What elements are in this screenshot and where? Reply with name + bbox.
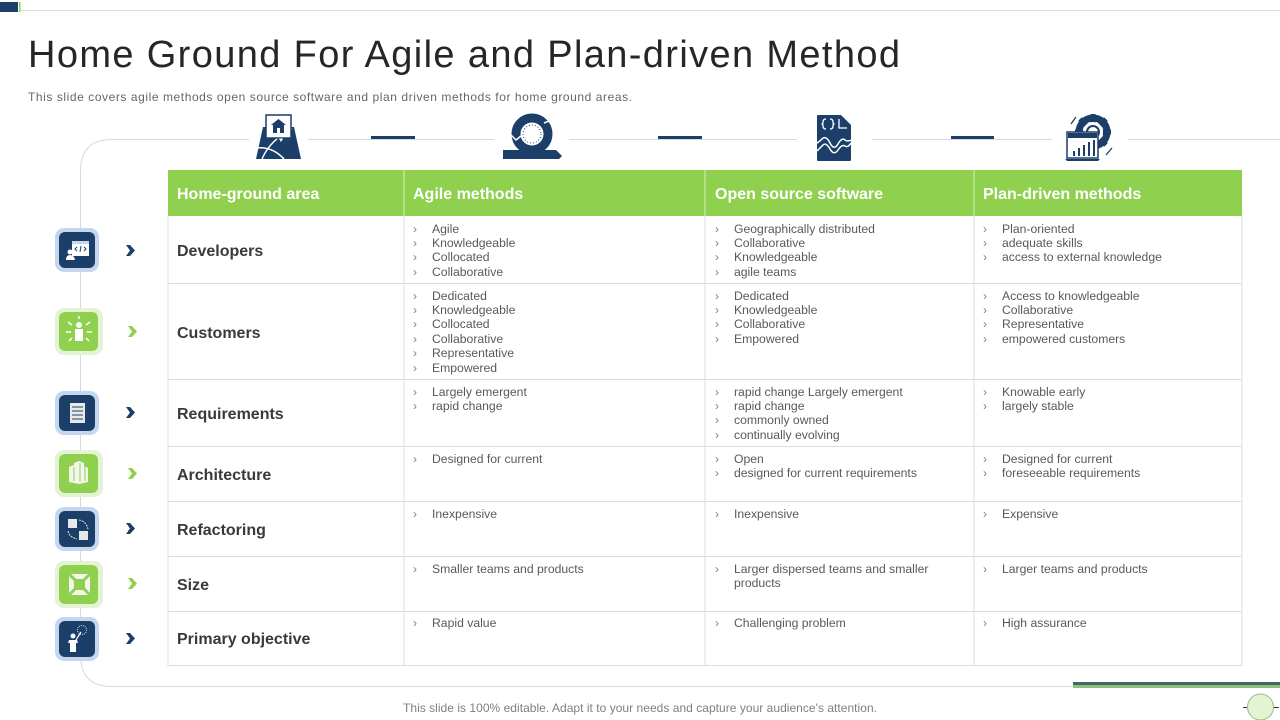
row: Customers: › xyxy=(413,332,417,346)
row: Size: Smaller teams and products xyxy=(432,562,584,576)
row: Primary objective xyxy=(177,616,1087,648)
connector rail xyxy=(80,140,1280,686)
row: Requirements: › xyxy=(983,399,987,413)
row: Customers: Representative xyxy=(432,346,514,360)
row: Refactoring xyxy=(177,507,1058,539)
chevron requirements xyxy=(126,407,135,418)
row: Architecture: designed for current requirements xyxy=(734,466,917,480)
row: Architecture: › xyxy=(715,452,719,466)
row: Developers: Developers xyxy=(177,243,263,260)
row: Developers: › xyxy=(715,236,719,250)
row: Customers: empowered customers xyxy=(1002,332,1125,346)
row: Size: › xyxy=(413,562,417,576)
icon: architecture badge xyxy=(55,450,103,497)
row: Requirements: Knowable early xyxy=(1002,385,1086,399)
row: Requirements: rapid change xyxy=(734,399,805,413)
page marker circle xyxy=(1243,694,1279,720)
row: Developers: › xyxy=(413,222,417,236)
row: Developers: › xyxy=(413,265,417,279)
row: Customers: › xyxy=(983,303,987,317)
icon: developer badge xyxy=(55,228,99,272)
row: Requirements: › xyxy=(715,413,719,427)
row: Customers: › xyxy=(983,317,987,331)
icon: settings dashboard xyxy=(1065,114,1112,161)
icon: size badge xyxy=(55,561,103,608)
row: Size: › xyxy=(715,562,719,576)
icon: requirements badge xyxy=(55,391,99,435)
row: Refactoring: Inexpensive xyxy=(734,507,799,521)
row: Refactoring: › xyxy=(983,507,987,521)
icon: home on map xyxy=(256,115,301,159)
row: Developers: › xyxy=(715,265,719,279)
chevron customers xyxy=(128,326,137,337)
row: Customers: Knowledgeable xyxy=(734,303,818,317)
row: Customers: › xyxy=(715,303,719,317)
row: Primary objective: Primary objective xyxy=(177,631,310,648)
row: Refactoring: Expensive xyxy=(1002,507,1058,521)
row: Developers: adequate skills xyxy=(1002,236,1083,250)
row: Developers: › xyxy=(983,250,987,264)
row: Developers: access to external knowledge xyxy=(1002,250,1162,264)
icon: agile cycle xyxy=(503,118,562,159)
row: Customers: › xyxy=(413,361,417,375)
row: Requirements: Requirements xyxy=(177,406,284,423)
row: Developers: › xyxy=(715,222,719,236)
row: Customers: › xyxy=(983,289,987,303)
row: Architecture: Open xyxy=(734,452,764,466)
row: Architecture: › xyxy=(983,452,987,466)
row: Requirements xyxy=(177,385,1086,442)
table header: Agile methods xyxy=(413,186,523,203)
table xyxy=(168,170,1242,666)
chevron developers xyxy=(126,245,135,256)
row: Developers: Agile xyxy=(432,222,459,236)
chevron architecture xyxy=(128,468,137,479)
row: Requirements: commonly owned xyxy=(734,413,829,427)
row: Customers: Dedicated xyxy=(734,289,789,303)
row: Architecture: Architecture xyxy=(177,467,271,484)
row: Customers: Knowledgeable xyxy=(432,303,516,317)
row: Refactoring: Refactoring xyxy=(177,522,266,539)
row: Architecture: Designed for current xyxy=(1002,452,1113,466)
row: Architecture xyxy=(177,452,1140,484)
footer note: This slide is 100% editable. Adapt it to your needs and capture your audience's attention. xyxy=(403,701,877,715)
top corner accent xyxy=(0,2,1280,12)
row: Customers: › xyxy=(715,332,719,346)
row: Refactoring: Inexpensive xyxy=(432,507,497,521)
chevron size xyxy=(128,578,137,589)
row: Customers: Empowered xyxy=(734,332,799,346)
row: Primary objective: › xyxy=(413,616,417,630)
row: Requirements: › xyxy=(715,399,719,413)
row: Requirements: Largely emergent xyxy=(432,385,527,399)
row: Developers: › xyxy=(715,250,719,264)
row: Developers: › xyxy=(413,250,417,264)
row: Customers: Dedicated xyxy=(432,289,487,303)
chevron refactoring xyxy=(126,523,135,534)
row: Refactoring: › xyxy=(715,507,719,521)
row: Size xyxy=(177,562,1148,594)
table header xyxy=(168,170,1242,216)
row: Customers: › xyxy=(715,289,719,303)
row: Requirements: › xyxy=(983,385,987,399)
row: Architecture: › xyxy=(983,466,987,480)
row: Developers: Geographically distributed xyxy=(734,222,875,236)
row: Requirements: › xyxy=(715,428,719,442)
row: Developers: agile teams xyxy=(734,265,796,279)
row: Requirements: rapid change Largely emergent xyxy=(734,385,903,399)
row: Developers: Collaborative xyxy=(734,236,805,250)
icon: refactoring badge xyxy=(55,507,99,551)
row: Developers: › xyxy=(413,236,417,250)
row: Architecture: › xyxy=(413,452,417,466)
icon: objective badge xyxy=(55,617,99,661)
row: Customers: Empowered xyxy=(432,361,497,375)
row: Primary objective: Rapid value xyxy=(432,616,497,630)
bottom accent bar xyxy=(1073,682,1280,688)
row: Primary objective: › xyxy=(983,616,987,630)
row: Primary objective: › xyxy=(715,616,719,630)
row: Customers: Collaborative xyxy=(432,332,503,346)
row: Primary objective: High assurance xyxy=(1002,616,1087,630)
subtitle: This slide covers agile methods open source software and plan driven methods for home ground areas. xyxy=(28,90,632,104)
row: Size: Size xyxy=(177,577,209,594)
table header: Home-ground area xyxy=(177,186,319,203)
row: Requirements: › xyxy=(413,399,417,413)
chevron objective xyxy=(126,633,135,644)
row: Primary objective: Challenging problem xyxy=(734,616,846,630)
row: Developers xyxy=(177,222,1162,279)
row: Customers: › xyxy=(413,317,417,331)
row: Size: › xyxy=(983,562,987,576)
title: Home Ground For Agile and Plan-driven Method xyxy=(28,34,900,76)
row: Architecture: Designed for current xyxy=(432,452,543,466)
row: Requirements: › xyxy=(715,385,719,399)
row: Customers: › xyxy=(715,317,719,331)
table header: Open source software xyxy=(715,186,883,203)
row: Developers: › xyxy=(983,222,987,236)
row: Architecture: › xyxy=(715,466,719,480)
dash accents xyxy=(371,136,994,139)
row: Developers: Plan-oriented xyxy=(1002,222,1074,236)
row: Customers: › xyxy=(413,289,417,303)
row: Customers: Representative xyxy=(1002,317,1084,331)
row: Customers: › xyxy=(983,332,987,346)
row: Developers: Knowledgeable xyxy=(734,250,818,264)
row: Refactoring: › xyxy=(413,507,417,521)
row: Customers xyxy=(177,289,1140,375)
row: Architecture: foreseeable requirements xyxy=(1002,466,1140,480)
row: Customers: Collocated xyxy=(432,317,490,331)
row: Requirements: rapid change xyxy=(432,399,503,413)
row: Developers: Collocated xyxy=(432,250,490,264)
row: Requirements: largely stable xyxy=(1002,399,1074,413)
row: Customers: Customers xyxy=(177,325,261,342)
icon: code file xyxy=(812,115,857,161)
icon: customer badge xyxy=(55,308,103,355)
row: Size: products xyxy=(734,576,781,590)
row: Size: Larger teams and products xyxy=(1002,562,1148,576)
row: Developers: › xyxy=(983,236,987,250)
row: Requirements: continually evolving xyxy=(734,428,840,442)
row: Developers: Collaborative xyxy=(432,265,503,279)
row: Customers: Collaborative xyxy=(734,317,805,331)
row: Developers: Knowledgeable xyxy=(432,236,516,250)
row: Requirements: › xyxy=(413,385,417,399)
table header: Plan-driven methods xyxy=(983,186,1141,203)
row: Customers: › xyxy=(413,346,417,360)
row: Customers: Collaborative xyxy=(1002,303,1073,317)
row: Customers: Access to knowledgeable xyxy=(1002,289,1140,303)
row: Customers: › xyxy=(413,303,417,317)
row: Size: Larger dispersed teams and smaller xyxy=(734,562,928,576)
